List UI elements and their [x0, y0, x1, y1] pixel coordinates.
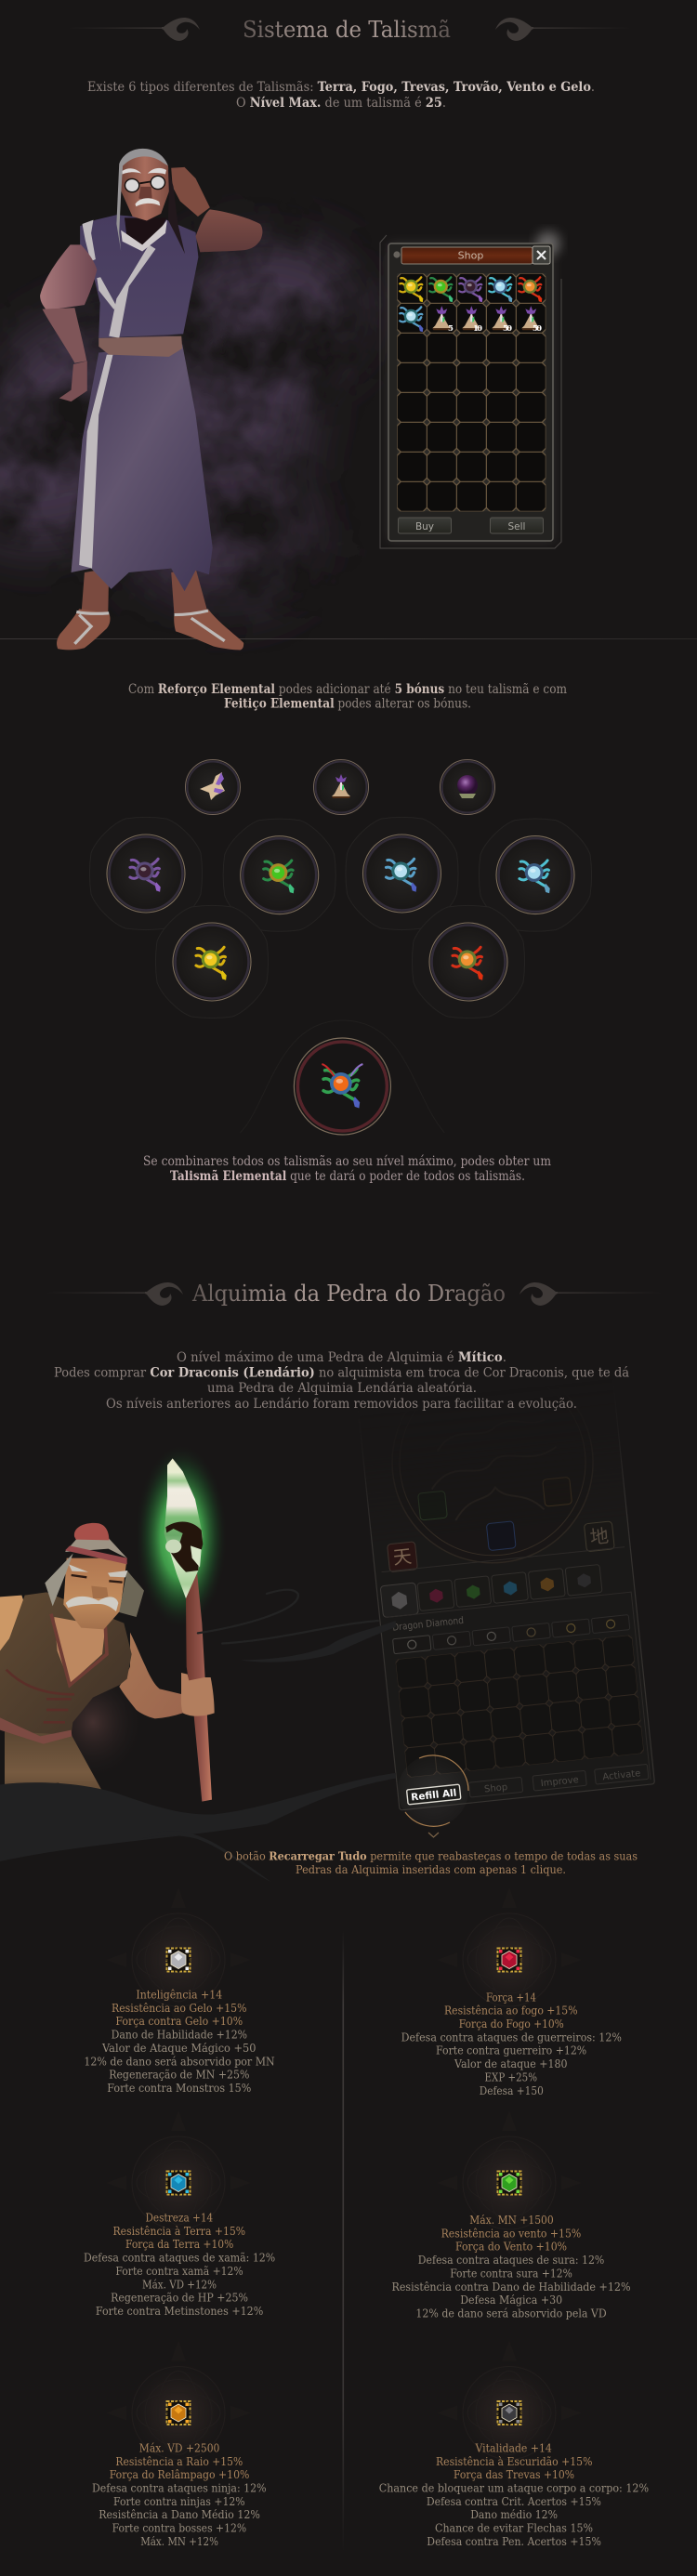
text: elemental talisman: [143, 1154, 551, 1184]
heading ornament right: talisman: [495, 18, 632, 41]
earth rune: [584, 1521, 614, 1552]
Refill All button: Refill All: [411, 1787, 457, 1803]
talisman: earth: [223, 819, 335, 931]
belt: [99, 336, 182, 357]
text: elemental upgrade: [128, 682, 567, 712]
body: vest: [0, 1592, 132, 1744]
talisman: fire earth yellow: [156, 905, 268, 1019]
medallion slots: [417, 1477, 576, 1557]
text: elemental talisman: Talismã Elemental que te dará o poder de todos os talismãs.: [170, 1169, 525, 1184]
stone bonus list: jade: Defesa contra ataques de sura: 12%: [418, 2254, 604, 2267]
left arm and hand: [40, 244, 97, 401]
head: [45, 1523, 144, 1629]
lower robe: [72, 345, 213, 591]
legs and sandals: [57, 569, 243, 651]
intro text: alchemy: O nível máximo de uma Pedra de Alquimia é Mítico.: [177, 1350, 506, 1365]
intro text: talisman types: O Nível Max. de um talismã é 25.: [236, 96, 446, 111]
stone block: amber: [92, 2340, 267, 2548]
highlight ring on Refill All: [398, 1755, 468, 1826]
heading ornament right: alchemy: [519, 1282, 664, 1306]
stone bonus list: diamond: 12% de dano será absorvido por MN: [84, 2055, 275, 2068]
item stack counts: 50: [503, 324, 512, 334]
Buy button: [398, 518, 452, 533]
stone block: jade: [392, 2110, 630, 2320]
stone bonus list: jade: Resistência ao vento +15%: [441, 2227, 581, 2240]
stone bonus list: diamond: Regeneração de MN +25%: [109, 2069, 249, 2082]
Shop button: Shop: [484, 1782, 508, 1794]
stone bonus list: ruby: [401, 1991, 622, 2097]
stone bonus list: sapphire: Máx. VD +12%: [142, 2278, 217, 2291]
stone bonus list: onyx: Dano médio 12%: [470, 2508, 558, 2521]
stone bonus list: sapphire: Destreza +14: [145, 2212, 214, 2225]
stone icon: sapphire: [106, 2110, 251, 2255]
stone bonus list: amber: Máx. MN +12%: [140, 2535, 218, 2548]
stone bonus list: ruby: Defesa +150: [480, 2084, 544, 2097]
stone bonus list: ruby: Resistência ao fogo +15%: [444, 2004, 578, 2017]
back glow: [40, 1663, 146, 1781]
heading ornament left: talisman: [67, 18, 200, 41]
title: Sistema de Talismã: Sistema de Talismã: [243, 17, 451, 43]
stone bonus list: onyx: Vitalidade +14: [475, 2441, 552, 2454]
panel: alchemy window, tilted: [364, 1405, 655, 1810]
stone bonus list: diamond: [84, 1989, 275, 2095]
stone bonus list: ruby: Força +14: [486, 1991, 536, 2004]
Refill All button: [407, 1784, 461, 1805]
text: elemental upgrade: Com Reforço Elemental podes adicionar até 5 bónus no teu talismã e com: [128, 682, 567, 697]
talisman: fire: [413, 905, 524, 1019]
stone bonus list: jade: Defesa Mágica +30: [460, 2293, 562, 2307]
stone icon: amber: [106, 2340, 251, 2485]
talisman: elemental, large: [240, 1020, 444, 1135]
neck and collar: [121, 217, 167, 252]
spear staff: [186, 1572, 212, 1802]
shop talisman items row 1: [400, 277, 542, 302]
stone block: diamond: [84, 1887, 275, 2095]
horizontal divider under talisman character: [0, 638, 697, 639]
stone bonus list: diamond: Valor de Ataque Mágico +50: [101, 2042, 256, 2055]
text: elemental talisman: Se combinares todos os talismãs ao seu nível máximo, podes obter um: [143, 1154, 551, 1169]
Shop button: [468, 1777, 523, 1797]
Buy button: Buy: [415, 521, 434, 532]
stone bonus list: amber: Forte contra ninjas +12%: [113, 2495, 245, 2508]
panel: Shop window: [380, 231, 561, 548]
stone bonus list: jade: Forte contra sura +12%: [450, 2267, 572, 2280]
stone bonus list: sapphire: Resistência à Terra +15%: [113, 2225, 245, 2238]
stone bonus list: onyx: Chance de bloquear um ataque corpo a corpo: 12%: [379, 2481, 649, 2494]
Activate button: Activate: [602, 1768, 641, 1782]
character: alchemist with spear: [0, 1443, 228, 1814]
shop item grid: [397, 273, 546, 511]
intro text: talisman types: [87, 80, 595, 111]
label: Dragon Diamond: Dragon Diamond: [392, 1615, 464, 1634]
item stack counts: 50: [533, 324, 542, 334]
Activate button: [595, 1764, 649, 1784]
heading ornament left: alchemy: [45, 1282, 183, 1306]
stone bonus list: sapphire: Forte contra Metinstones +12%: [96, 2305, 263, 2318]
shop title bar: Shop: [458, 249, 483, 262]
stone block: ruby: [401, 1887, 622, 2097]
character: old man with glasses: [40, 149, 262, 651]
stone bonus list: ruby: Forte contra guerreiro +12%: [436, 2044, 586, 2057]
talisman: ice: [480, 819, 591, 931]
item stack counts: [448, 324, 542, 334]
intro text: talisman types: Existe 6 tipos diferentes de Talismãs: Terra, Fogo, Trevas, Trovão, Vento e Gelo.: [87, 80, 595, 95]
stone bonus list: onyx: Defesa contra Pen. Acertos +15%: [427, 2535, 601, 2548]
caption: Refill All: O botão Recarregar Tudo permite que reabasteças o tempo de todas as suas: [224, 1849, 638, 1862]
Improve button: [533, 1770, 586, 1791]
ink brush strokes: [0, 1590, 396, 1882]
stone icon: diamond: [106, 1887, 251, 2032]
Improve button: Improve: [540, 1775, 579, 1789]
hand: [181, 1673, 215, 1716]
robe white trims: [79, 220, 155, 569]
Sell button: Sell: [508, 521, 525, 532]
intro text: alchemy: Podes comprar Cor Draconis (Lendário) no alquimista em troca de Cor Draconis, que te dá: [54, 1366, 629, 1381]
stone bonus list: sapphire: Força da Terra +10%: [125, 2238, 233, 2251]
stone bonus list: ruby: Defesa contra ataques de guerreiros: 12%: [401, 2031, 622, 2044]
stone bonus list: onyx: Resistência à Escuridão +15%: [436, 2455, 592, 2468]
body: belt: [0, 1717, 72, 1744]
heaven rune: 天: [392, 1544, 413, 1569]
item stack counts: 5: [448, 324, 454, 334]
stone bonus list: jade: 12% de dano será absorvido pela VD: [415, 2307, 607, 2320]
stone bonus list: ruby: Força do Fogo +10%: [459, 2017, 564, 2031]
stone bonus list: onyx: Chance de evitar Flechas 15%: [435, 2522, 593, 2535]
body: arm: [119, 1633, 183, 1718]
stone bonus list: diamond: Dano de Habilidade +12%: [112, 2029, 247, 2042]
item stack counts: 10: [473, 324, 482, 334]
stone bonus list: jade: [392, 2214, 630, 2320]
caption: Refill All: [224, 1849, 638, 1876]
stone bonus list: jade: Resistência contra Dano de Habilidade +12%: [392, 2280, 630, 2293]
stone block: sapphire: [84, 2110, 275, 2318]
heaven rune: [388, 1542, 417, 1572]
stone bonus list: amber: Força do Relâmpago +10%: [110, 2468, 249, 2481]
stone bonus list: sapphire: [84, 2212, 275, 2318]
raised arm: [171, 167, 262, 252]
title: Alquimia da Pedra do Dragão: Alquimia da Pedra do Dragão: [191, 1281, 506, 1307]
stone block: onyx: [379, 2340, 649, 2548]
shop title bar: [393, 247, 533, 264]
stone icon: jade: [437, 2110, 582, 2255]
talisman: darkness: [89, 818, 203, 929]
head and face: [116, 149, 185, 254]
alchemy stone grid: [395, 1635, 644, 1778]
stone bonus list: sapphire: Regeneração de HP +25%: [111, 2292, 248, 2305]
text: elemental upgrade: Feitiço Elemental podes alterar os bónus.: [224, 697, 471, 712]
intro text: alchemy: uma Pedra de Alquimia Lendária aleatória.: [207, 1381, 477, 1396]
body: fastenings: [7, 1670, 74, 1722]
shop glow: [380, 231, 561, 548]
stone bonus list: ruby: Valor de ataque +180: [454, 2057, 567, 2070]
body: skirt: [5, 1731, 114, 1814]
earth rune: 地: [589, 1524, 610, 1548]
intro text: alchemy: [54, 1350, 629, 1412]
stone bonus list: onyx: [379, 2441, 649, 2548]
gem tabs: [380, 1564, 602, 1618]
stone bonus list: amber: Máx. VD +2500: [139, 2441, 219, 2454]
intro text: alchemy: Os níveis anteriores ao Lendário foram removidos para facilitar a evolução.: [106, 1397, 577, 1412]
spear blade: [164, 1458, 203, 1598]
stone bonus list: jade: Força do Vento +10%: [455, 2241, 567, 2254]
upper robe: [80, 215, 198, 338]
stone icon: ruby: [437, 1887, 582, 2032]
grade buttons: [393, 1615, 630, 1654]
stone bonus list: amber: Defesa contra ataques ninja: 12%: [92, 2481, 267, 2494]
Sell button: [491, 518, 543, 533]
stone bonus list: amber: Resistência a Dano Médio 12%: [99, 2508, 260, 2521]
stone bonus list: ruby: EXP +25%: [485, 2070, 537, 2083]
vertical divider between stone columns: [342, 1930, 344, 2553]
stone bonus list: sapphire: Defesa contra ataques de xamã: 12%: [84, 2252, 275, 2265]
stone bonus list: diamond: Inteligência +14: [136, 1989, 223, 2002]
stone bonus list: amber: [92, 2441, 267, 2548]
item circle: purple orb: [441, 760, 494, 814]
smoke background: talisman section: [0, 121, 400, 660]
caption: Refill All: Pedras da Alquimia inseridas com apenas 1 clique.: [296, 1862, 566, 1876]
body: left shoulder: [0, 1596, 25, 1651]
body: chest and collar: [51, 1614, 107, 1685]
stone bonus list: onyx: Defesa contra Crit. Acertos +15%: [427, 2495, 601, 2508]
stone bonus list: diamond: Força contra Gelo +10%: [115, 2015, 243, 2028]
shop close button: [533, 246, 550, 264]
stone bonus list: amber: Resistência a Raio +15%: [115, 2455, 243, 2468]
stone icon: onyx: [437, 2340, 582, 2485]
dragon medallion: [393, 1444, 593, 1563]
item circle: elemental bell: [314, 760, 368, 814]
stone bonus list: diamond: Forte contra Monstros 15%: [107, 2082, 251, 2095]
stone bonus list: sapphire: Forte contra xamã +12%: [115, 2265, 243, 2278]
green spear glow: [135, 1443, 228, 1629]
talisman: thunder: [346, 818, 458, 929]
item circle: elemental scroll: [186, 760, 240, 814]
stone bonus list: onyx: Força das Trevas +10%: [454, 2468, 574, 2481]
shop items row 2: [400, 306, 540, 332]
stone bonus list: jade: Máx. MN +1500: [469, 2214, 554, 2227]
stone bonus list: amber: Forte contra bosses +12%: [112, 2522, 246, 2535]
chevron: [428, 1833, 439, 1837]
stone bonus list: diamond: Resistência ao Gelo +15%: [112, 2002, 247, 2015]
